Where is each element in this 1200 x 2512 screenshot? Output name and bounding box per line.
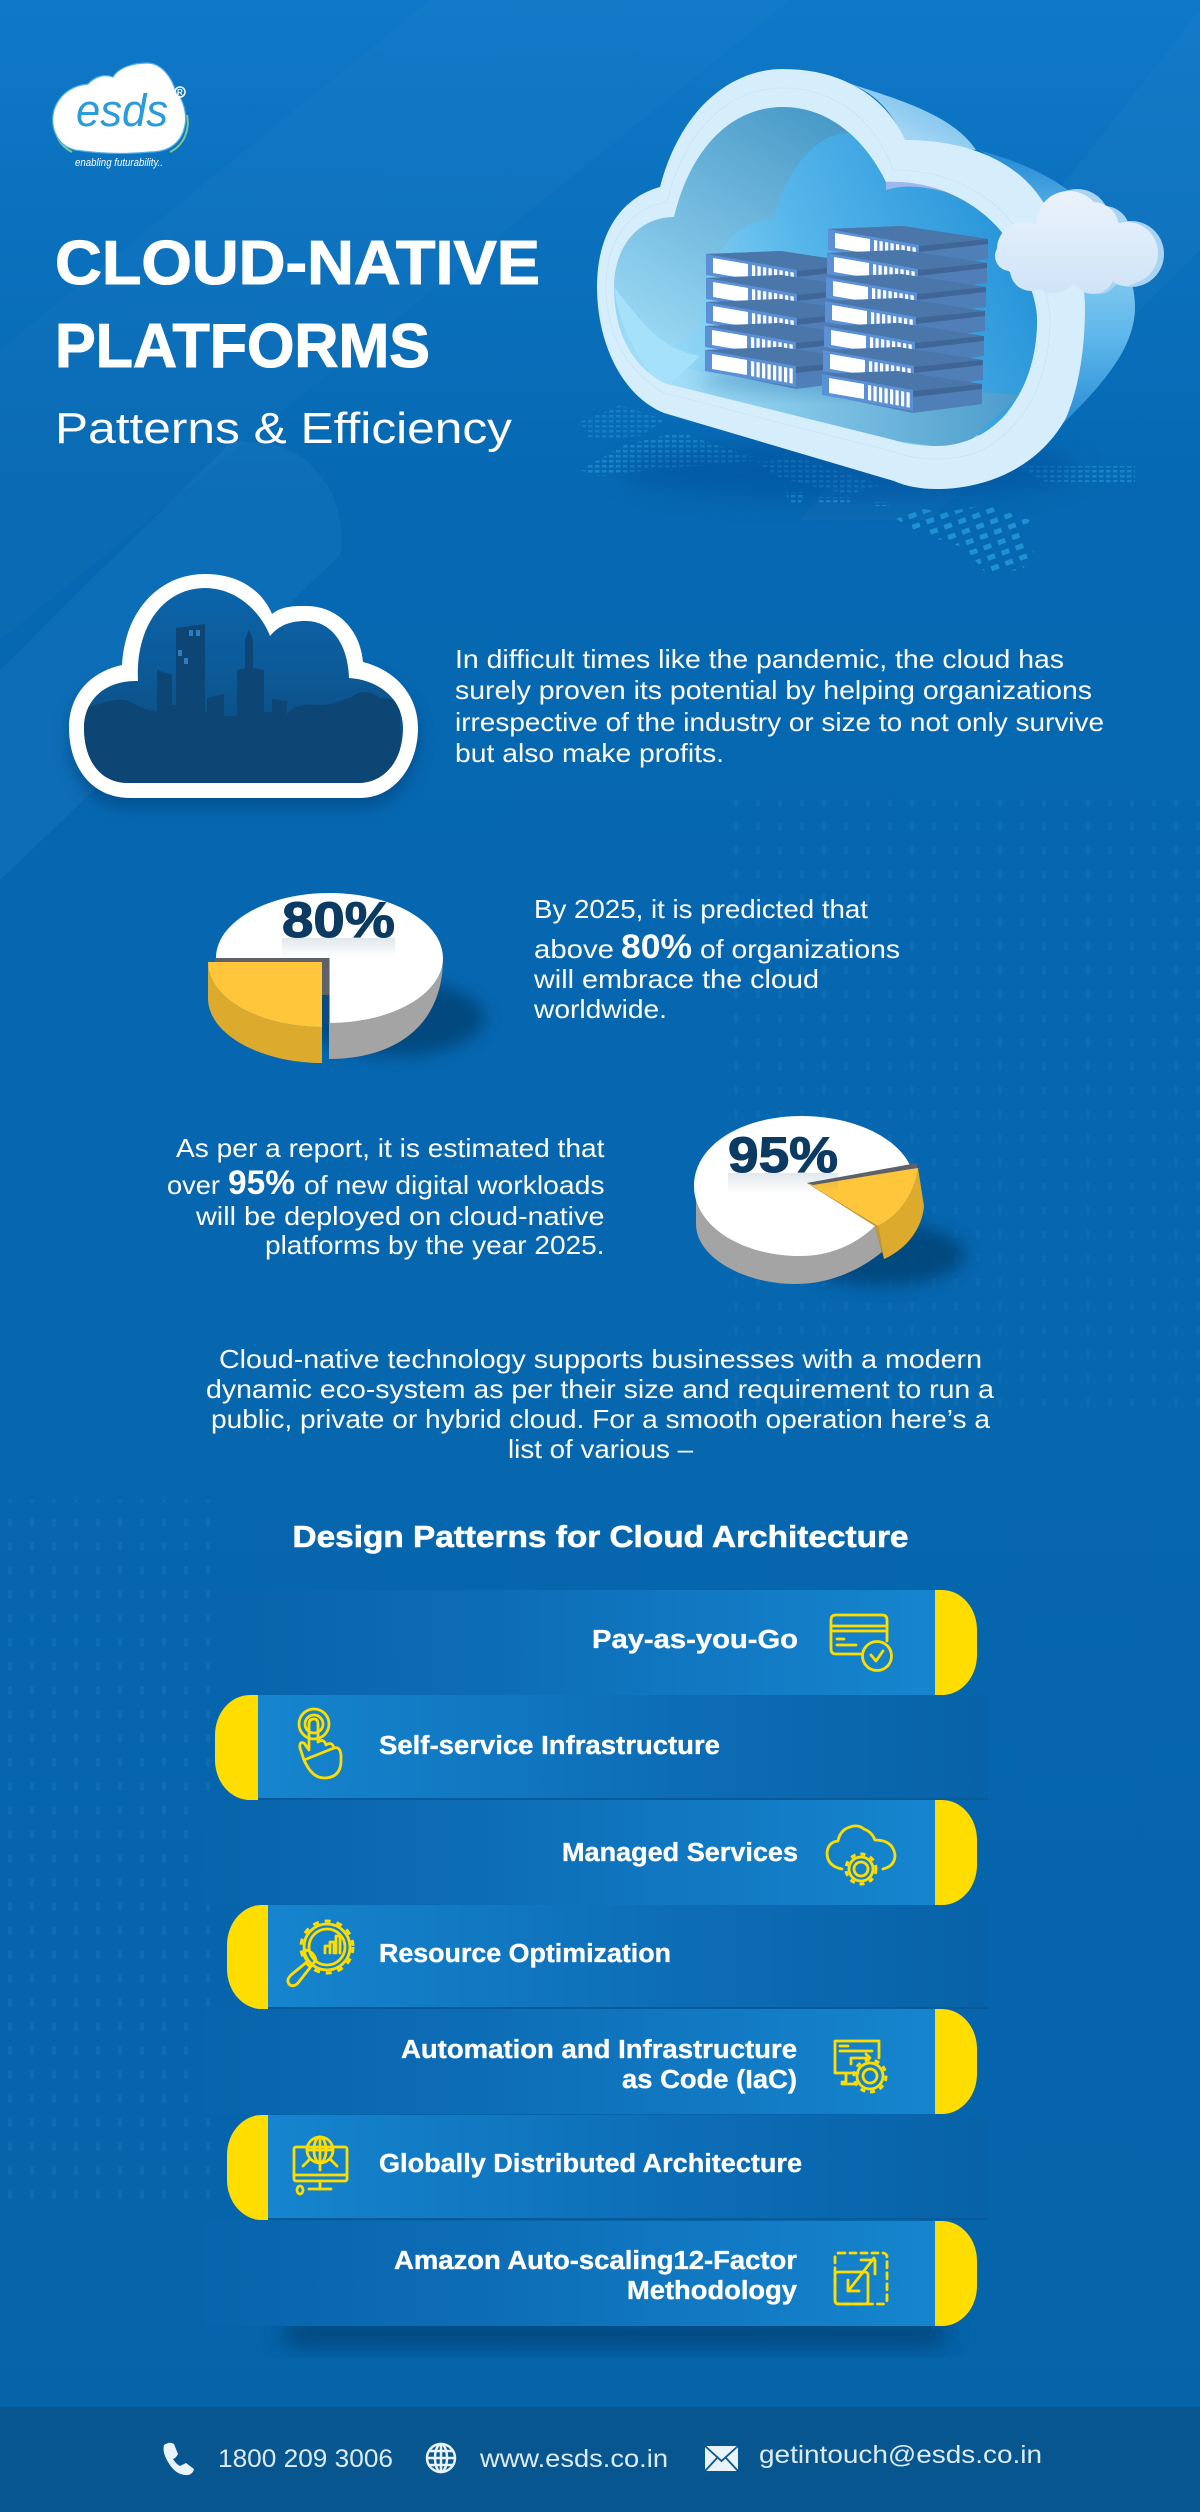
icon: gear and wrench <box>288 1921 353 1986</box>
icon: card with check <box>831 1615 892 1670</box>
row: Pay-as-you-Go <box>227 1590 977 1695</box>
icon: cloud gear <box>827 1826 895 1884</box>
small foreground cloud <box>995 189 1164 294</box>
row: Globally Distributed Architecture <box>227 2115 988 2220</box>
pie chart: 95%: 95% <box>728 1127 838 1183</box>
email: getintouch@esds.co.in <box>759 2441 1042 2469</box>
title: PLATFORMS <box>55 312 430 381</box>
text: 95% report: 95% <box>228 1164 295 1202</box>
heading: design patterns: Design Patterns for Cloud Architecture <box>292 1519 908 1554</box>
logo: esds: esds <box>76 85 168 136</box>
text: intro to list: Cloud-native technology supports businesses with a modern <box>219 1344 982 1374</box>
icon: monitor gear <box>835 2041 886 2092</box>
text: intro to list: public, private or hybrid cloud. For a smooth operation here’s a <box>211 1404 991 1434</box>
row: Automation and Infrastructure as Code: as Code (IaC) <box>622 2066 797 2094</box>
text: pandemic paragraph: irrespective of the industry or size to not only survive <box>455 707 1104 737</box>
icon: mail <box>705 2446 738 2471</box>
text: 95% report <box>167 1133 605 1260</box>
text: 80% prediction: of organizations <box>700 934 900 964</box>
logo: esds: enabling futurability.. <box>75 157 163 169</box>
row: Amazon Auto-scaling 12-Factor Methodology: Amazon Auto-scaling12-Factor <box>394 2247 797 2275</box>
row: Globally Distributed Architecture: Globally Distributed Architecture <box>379 2150 802 2178</box>
text: 80% prediction: will embrace the cloud <box>533 964 819 994</box>
row: Automation and Infrastructure as Code: Automation and Infrastructure <box>401 2036 797 2064</box>
pie chart: 80% <box>208 892 485 1063</box>
text: 80% prediction: above <box>534 934 614 964</box>
icon: globe <box>427 2444 455 2472</box>
icon: globe monitor <box>294 2137 347 2194</box>
icon: cloud with city skyline <box>69 574 418 808</box>
row: Pay-as-you-Go: Pay-as-you-Go <box>592 1626 798 1654</box>
row: Automation and Infrastructure as Code <box>205 2009 977 2114</box>
text: 80% prediction: worldwide. <box>533 994 667 1024</box>
text: intro to list: list of various – <box>508 1434 694 1464</box>
title <box>55 229 540 381</box>
row: Resource Optimization: Resource Optimization <box>379 1940 671 1968</box>
icon: resize <box>835 2253 887 2304</box>
row: Managed Services: Managed Services <box>562 1839 798 1867</box>
logo: esds: R <box>177 88 183 97</box>
text: 80% prediction <box>533 894 900 1024</box>
skyline <box>80 624 400 790</box>
illustration: 3D cloud with servers <box>597 69 1135 500</box>
drop shadow under list <box>285 2322 945 2344</box>
row: Managed Services <box>205 1800 977 1905</box>
icon: phone <box>164 2443 194 2475</box>
text: intro to list <box>206 1344 995 1464</box>
logo: esds <box>53 63 188 169</box>
text: 95% report: As per a report, it is estimated that <box>176 1133 605 1163</box>
text: pandemic paragraph: but also make profits. <box>455 738 724 768</box>
subtitle: Patterns & Efficiency <box>55 404 512 453</box>
phone number: 1800 209 3006 <box>218 2445 393 2473</box>
pie chart: 95% <box>694 1116 965 1286</box>
text: pandemic paragraph <box>455 644 1104 768</box>
row: Amazon Auto-scaling 12-Factor Methodology <box>205 2221 977 2326</box>
text: 95% report: over <box>167 1170 220 1200</box>
row: Resource Optimization <box>227 1905 988 2009</box>
dotted world map <box>580 405 1135 575</box>
row: Self-service Infrastructure: Self-service Infrastructure <box>379 1732 720 1760</box>
title: CLOUD-NATIVE <box>55 229 540 298</box>
text: 95% report: platforms by the year 2025. <box>265 1230 604 1260</box>
text: 95% report: of new digital workloads <box>304 1170 604 1200</box>
text: 80% prediction: 80% <box>621 928 692 966</box>
pie chart: 80%: 80% <box>282 892 395 948</box>
footer bar <box>0 2407 1200 2512</box>
text: intro to list: dynamic eco-system as per their size and requirement to run a <box>206 1374 995 1404</box>
website: www.esds.co.in <box>479 2445 668 2473</box>
row: Self-service Infrastructure <box>215 1695 988 1800</box>
text: pandemic paragraph: surely proven its potential by helping organizations <box>455 675 1092 705</box>
text: 95% report: will be deployed on cloud-native <box>195 1201 604 1231</box>
icon: touch hand <box>299 1709 341 1778</box>
text: 80% prediction: By 2025, it is predicted that <box>534 894 869 924</box>
row: Amazon Auto-scaling 12-Factor Methodology: Methodology <box>627 2277 798 2305</box>
text: pandemic paragraph: In difficult times like the pandemic, the cloud has <box>455 644 1064 674</box>
